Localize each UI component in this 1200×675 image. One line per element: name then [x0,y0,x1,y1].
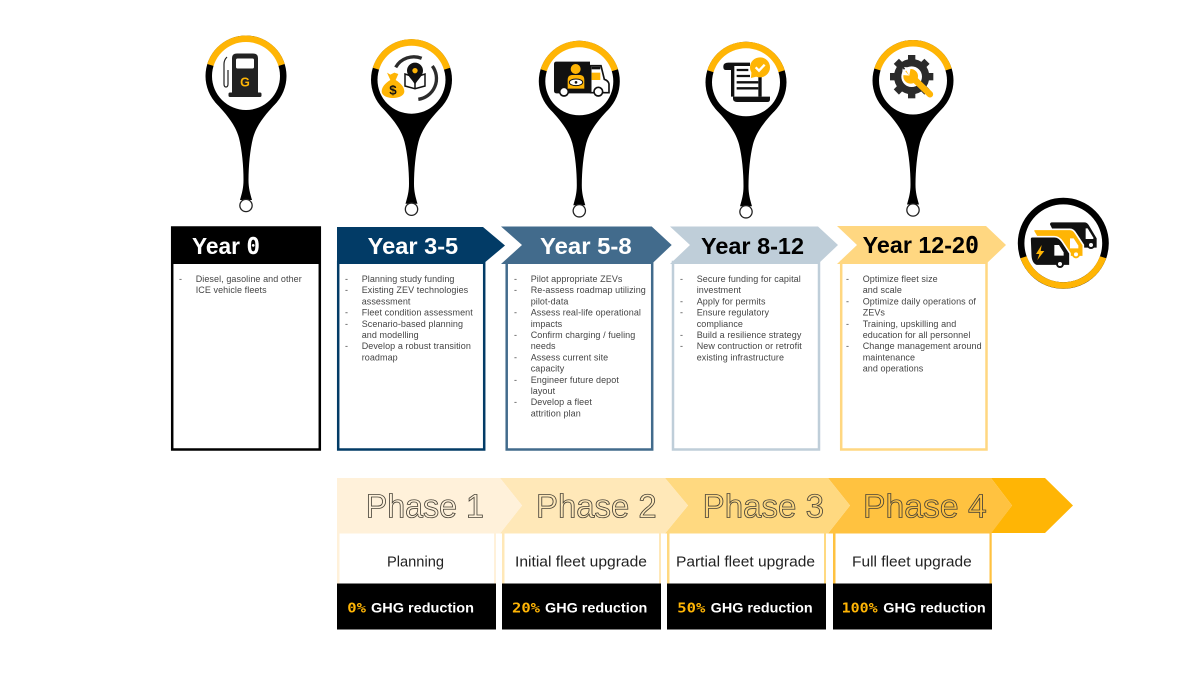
icon: money bag and map [382,57,436,99]
text block: year 12-20: - [846,274,849,284]
panel: year 12-20 [837,226,1006,450]
heading: phase 1: Phase 1 [366,487,484,524]
text block: year 3-5: roadmap [362,352,398,362]
text block: year 8-12: Secure funding for capital [697,274,801,284]
text block: year 8-12: Build a resilience strategy [697,330,802,340]
text block: year 5-8: capacity [531,364,565,374]
icon: truck with driver [554,62,609,96]
icon: fuel pump [224,54,262,97]
panel: phase 3 details [667,533,826,630]
text block: year 5-8: - [514,308,517,318]
stat: 50% GHG reduction: 50% [677,601,706,617]
text block: year 8-12: investment [697,285,741,295]
text block: year 5-8: - [514,397,517,407]
heading: year 5-8: Year 5-8 [540,233,632,259]
text block: year 12-20: ZEVs [863,308,885,318]
panel: phase 2 details [502,533,661,630]
heading: year 3-5: Year 3-5 [368,233,458,259]
stat: 0% GHG reduction: 0% [347,601,367,617]
stat: 50% GHG reduction [677,600,813,617]
label: full fleet upgrade: Full fleet upgrade [852,554,972,571]
text block: year 5-8: Re-assess roadmap utilizing [531,285,646,295]
text block: year 5-8: needs [531,341,556,351]
text block: year 8-12: Apply for permits [697,296,766,306]
text block: year 0 [179,274,302,295]
text block: year 8-12: - [680,296,683,306]
text block: year 5-8 [514,274,646,418]
text block: year 8-12: existing infrastructure [697,352,784,362]
text block: year 3-5: - [345,274,348,284]
heading: phase 2: Phase 2 [536,487,657,524]
text block: year 8-12: - [680,274,683,284]
stat: 100% GHG reduction: 100% [842,601,879,617]
stat: 20% GHG reduction [512,600,647,617]
heading: phase 3: Phase 3 [703,487,824,524]
text block: year 12-20: - [846,319,849,329]
icon: electric fleet badge [1020,201,1106,289]
text block: year 5-8: Assess real-life operational [531,308,641,318]
text block: year 5-8: - [514,375,517,385]
text block: year 8-12: Ensure regulatory [697,308,770,318]
text block: year 12-20: and scale [863,285,902,295]
pin: year 3-5 planning [371,39,452,216]
label: initial fleet upgrade: Initial fleet upgrade [515,554,647,571]
text block: year 3-5: - [345,319,348,329]
text block: year 8-12: New contruction or retrofit [697,341,802,351]
stat: 20% GHG reduction: 20% [512,601,541,617]
text block: year 5-8: Confirm charging / fueling [531,330,635,340]
text block: year 5-8: Develop a fleet [531,397,592,407]
text block: year 5-8: attrition plan [531,408,581,418]
text block: year 3-5: and modelling [362,330,419,340]
stat: 0% GHG reduction: GHG reduction [371,600,474,616]
text block: year 5-8: - [514,274,517,284]
text block: year 3-5: assessment [362,296,411,306]
label: partial fleet upgrade: Partial fleet upgrade [676,554,815,571]
text block: year 0: Diesel, gasoline and other [196,274,302,284]
pin: year 12-20 optimize [872,40,954,217]
text block: year 5-8: Assess current site [531,352,608,362]
text block: year 3-5: - [345,308,348,318]
pin: year 5-8 pilot [539,41,620,218]
panel: year 3-5 [337,227,505,450]
text block: year 3-5: Develop a robust transition [362,341,471,351]
heading: year 8-12: Year 8-12 [701,233,804,259]
text block: year 5-8: Engineer future depot [531,375,619,385]
text block: year 5-8: - [514,352,517,362]
panel: year 5-8 [501,226,672,450]
text block: year 5-8: impacts [531,319,563,329]
pin: year 0 fuel [206,35,286,212]
stat: 100% GHG reduction: GHG reduction [883,600,986,616]
heading: phase 4: Phase 4 [863,487,987,524]
heading: year 12-20: Year 12-20 [863,232,979,259]
text block: year 3-5: - [345,285,348,295]
text block: year 3-5 [345,274,473,362]
text block: year 5-8: - [514,330,517,340]
text block: year 8-12: compliance [697,319,743,329]
text block: year 3-5: Fleet condition assessment [362,308,473,318]
icon: gear and wrench [890,55,933,98]
text block: year 8-12 [680,274,802,362]
panel: year 8-12 [670,226,838,450]
text block: year 3-5: - [345,341,348,351]
text block: year 5-8: layout [531,386,556,396]
stat: 100% GHG reduction [842,600,986,617]
panel: phase 1 details [337,533,496,630]
text block: year 12-20: Change management around [863,341,982,351]
text block: year 0: ICE vehicle fleets [196,285,267,295]
icon: fuel pump: G [240,76,250,90]
text block: year 12-20: - [846,296,849,306]
text block: year 5-8: pilot-data [531,296,569,306]
pin: year 8-12 permits [706,42,786,219]
text block: year 5-8: - [514,285,517,295]
panel: year 0 [171,226,321,450]
text block: year 12-20: maintenance [863,352,915,362]
text block: year 12-20: Training, upskilling and [863,319,956,329]
heading: year 0: Year 0 [192,233,260,260]
chevron band: phases [337,478,1073,534]
text block: year 3-5: Existing ZEV technologies [362,285,469,295]
text block: year 12-20: and operations [863,364,924,374]
stat: 20% GHG reduction: GHG reduction [545,600,647,616]
icon: money bag and map: $ [389,83,397,98]
text block: year 5-8: Pilot appropriate ZEVs [531,274,623,284]
text block: year 0: - [179,274,182,284]
text block: year 8-12: - [680,308,683,318]
text block: year 3-5: Scenario-based planning [362,319,463,329]
text block: year 8-12: - [680,330,683,340]
text block: year 12-20: Optimize daily operations of [863,296,976,306]
text block: year 12-20: Optimize fleet size [863,274,938,284]
text block: year 3-5: Planning study funding [362,274,455,284]
text block: year 12-20: education for all personnel [863,330,970,340]
icon: scroll with check [723,57,770,102]
text block: year 8-12: - [680,341,683,351]
stat: 50% GHG reduction: GHG reduction [711,600,813,616]
text block: year 12-20 [846,274,982,374]
text block: year 12-20: - [846,341,849,351]
label: planning: Planning [387,554,444,571]
panel: phase 4 details [833,533,992,630]
